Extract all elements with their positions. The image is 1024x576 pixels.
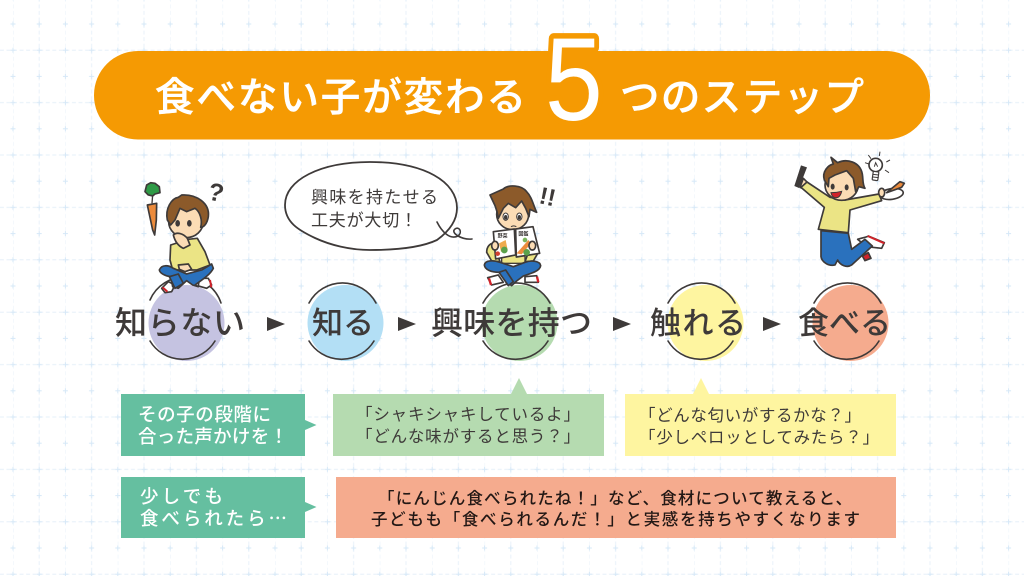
title banner — [94, 13, 930, 145]
circle: 知らない — [148, 277, 224, 361]
callout: green: 「どんな味がすると思う？」 — [356, 427, 580, 446]
step label: 触れる: 触れる — [650, 306, 746, 341]
circle: 知る — [308, 283, 384, 361]
callout: green — [333, 378, 604, 456]
title banner: つのステップ — [620, 76, 864, 120]
icon: carrot — [145, 183, 160, 235]
icon: thinking child with carrot — [145, 178, 226, 293]
arrow 2 — [398, 317, 416, 331]
arrow 3 — [613, 317, 631, 331]
icon: vegetable book — [493, 227, 540, 259]
callout: yellow — [625, 378, 896, 456]
label: 少しでも: 少しでも — [140, 486, 223, 507]
label: その子の段階に: 合った声かけを！ — [138, 426, 288, 447]
callout: salmon: 「にんじん食べられたね！」など、食材について教えると、 — [378, 489, 852, 508]
callout: salmon: 子どもも「食べられるんだ！」と実感を持ちやすくなります — [371, 510, 860, 529]
arrow 4 — [763, 317, 781, 331]
speech bubble: 興味を持たせる — [311, 188, 438, 207]
label: その子の段階に: その子の段階に — [138, 404, 271, 425]
icon: light bulb — [865, 152, 890, 181]
icon: vegetable book: 図鑑 — [518, 231, 528, 238]
callout: yellow: 「どんな匂いがするかな？」 — [639, 406, 861, 425]
speech bubble — [285, 162, 472, 250]
title banner: 食べない子が変わる — [155, 76, 526, 120]
icon: child jumping with carrot — [794, 152, 904, 266]
step label: 知る: 知る — [312, 306, 374, 341]
step label: 知らない: 知らない — [115, 305, 245, 341]
label: その子の段階に — [121, 394, 316, 456]
callout: salmon — [336, 477, 896, 538]
icon: vegetable book: 野菜 — [498, 233, 508, 240]
icon: plate with carrot — [879, 182, 904, 201]
step label: 食べる: 食べる — [798, 306, 891, 341]
icon: chopsticks — [794, 165, 807, 188]
icon: child reading a vegetable book: !! — [537, 183, 558, 212]
callout: yellow: 「少しペロッとしてみたら？」 — [639, 428, 879, 447]
circle: 触れる — [668, 283, 744, 361]
callout: green: 「シャキシャキしているよ」 — [356, 405, 580, 424]
label: 少しでも: 食べられたら… — [140, 505, 287, 531]
arrow 1 — [267, 317, 285, 331]
step label: 興味を持つ: 興味を持つ — [431, 305, 592, 341]
icon: child reading a vegetable book — [484, 183, 558, 286]
title banner: 5 — [545, 13, 603, 145]
icon: thinking child with carrot: ? — [206, 178, 226, 208]
speech bubble: 工夫が大切！ — [311, 211, 417, 230]
circle: 食べる — [812, 283, 888, 361]
label: 少しでも — [121, 477, 316, 538]
circle: 興味を持つ — [482, 283, 558, 361]
title banner: 5 — [545, 13, 603, 145]
